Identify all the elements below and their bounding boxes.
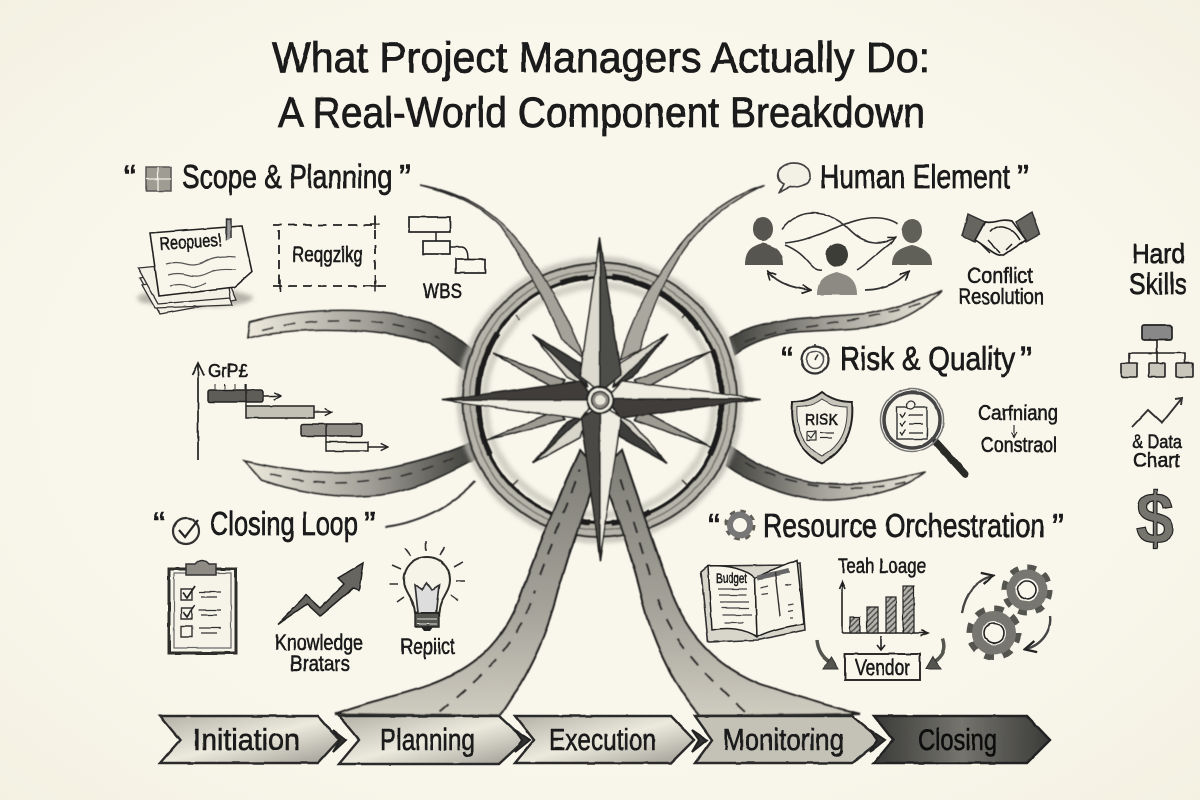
icon: handshake xyxy=(962,212,1040,255)
people network xyxy=(745,213,932,295)
road: lower right xyxy=(726,447,925,500)
icon: dollar sign: $ xyxy=(1136,479,1174,559)
person middle xyxy=(817,243,857,295)
road: lower left xyxy=(245,442,474,496)
chevron: execution xyxy=(515,716,707,763)
connection arrows xyxy=(782,213,895,243)
compass star xyxy=(442,238,760,560)
heading: hard skills: Skills xyxy=(1129,268,1187,301)
compass ring xyxy=(460,260,740,540)
title: A Real-World Component Breakdown xyxy=(278,89,925,137)
panel: hard skills xyxy=(1121,238,1193,559)
icon: rising arrow xyxy=(275,563,363,676)
heading: closing loop: “ xyxy=(153,504,165,545)
heading: risk and quality: Risk & Quality xyxy=(840,340,1015,377)
label: replicate: Repiict xyxy=(400,634,455,659)
chevron: monitoring: Monitoring xyxy=(723,722,844,757)
thin curve to closing loop xyxy=(385,481,475,527)
heading: human element: ” xyxy=(1017,157,1029,198)
chevron: planning xyxy=(339,716,530,764)
heading: closing loop: ” xyxy=(364,504,376,545)
icon: org chart xyxy=(1121,325,1193,377)
dashed scope box xyxy=(273,215,386,292)
chevron: initiation xyxy=(160,716,346,763)
icon: line chart xyxy=(1132,398,1182,427)
label: data chart xyxy=(1132,432,1182,472)
panel: human element xyxy=(745,157,1044,309)
heading: resource orchestration xyxy=(708,506,1064,547)
heading: human element xyxy=(778,157,1029,198)
east point xyxy=(606,381,760,418)
icon: rising arrow: Bratars xyxy=(290,651,350,676)
heading: risk and quality: “ xyxy=(781,339,793,380)
heading: hard skills: Hard xyxy=(1132,238,1185,269)
heading: scope and planning: “ xyxy=(124,157,136,198)
heading: closing loop: Closing Loop xyxy=(210,505,358,542)
heading: scope and planning: ” xyxy=(399,157,411,198)
chevron: planning: Planning xyxy=(380,722,475,757)
heading: risk and quality: ” xyxy=(1020,339,1032,380)
label: conflict resolution: Conflict xyxy=(967,263,1033,288)
heading: scope and planning: Scope & Planning xyxy=(182,158,392,195)
vendor box with arrows: Vendor xyxy=(855,655,910,680)
panel: scope and planning xyxy=(124,157,485,460)
heading: resource orchestration: Resource Orchestration xyxy=(763,507,1045,544)
label: control loop: Carfniang xyxy=(978,402,1058,425)
road: upper right xyxy=(730,290,942,354)
icon: magnifier checklist xyxy=(880,388,965,474)
icon: risk shield xyxy=(792,392,852,463)
icon: budget book: Budget xyxy=(716,570,747,586)
chevron: execution: Execution xyxy=(549,722,656,757)
heading: hard skills xyxy=(1129,238,1187,301)
gantt chart: GrP£ xyxy=(208,361,248,381)
panel: resource orchestration xyxy=(701,506,1064,680)
chevron: initiation: Initiation xyxy=(193,722,300,757)
road: lower right big xyxy=(602,450,860,716)
chevron: closing: Closing xyxy=(918,722,997,757)
process chevrons xyxy=(160,716,1050,764)
central compass with roads xyxy=(245,185,942,716)
chevron: closing xyxy=(874,716,1050,763)
icon: rising arrow: Knowledge xyxy=(275,630,363,655)
icon: gears xyxy=(962,568,1050,657)
panel: risk and quality xyxy=(781,339,1058,474)
heading: risk and quality xyxy=(781,339,1032,380)
dashed scope box: Reqgzlkg xyxy=(292,242,363,267)
WBS tree xyxy=(409,217,485,303)
chevron: monitoring xyxy=(695,716,885,763)
label: control loop xyxy=(978,402,1058,457)
label: conflict resolution: Resolution xyxy=(958,284,1044,309)
dark ring arcs xyxy=(478,277,722,523)
icon: risk shield: RISK xyxy=(805,412,838,429)
WBS tree: WBS xyxy=(423,280,462,303)
road: thin upper left xyxy=(420,185,584,358)
heading: closing loop xyxy=(153,504,376,545)
label: control loop: Constraol xyxy=(981,434,1057,457)
road: lower left big xyxy=(335,450,598,716)
title xyxy=(272,34,930,137)
north point xyxy=(580,238,621,392)
tertiary points xyxy=(487,352,710,447)
gantt chart xyxy=(192,361,387,460)
diagonal points xyxy=(533,335,667,463)
icon: request notes xyxy=(137,219,253,314)
icon: request notes: Reopues! xyxy=(159,230,222,254)
heading: human element: Human Element xyxy=(820,158,1010,195)
compass hub xyxy=(587,387,613,413)
panel: closing loop xyxy=(153,504,465,676)
person right xyxy=(892,219,932,265)
heading: scope and planning xyxy=(124,157,411,198)
west point xyxy=(442,381,594,419)
heading: resource orchestration: “ xyxy=(708,506,720,547)
heading: resource orchestration: ” xyxy=(1052,506,1064,547)
person left xyxy=(745,217,783,265)
vendor box with arrows xyxy=(817,636,944,680)
label: data chart: Chart xyxy=(1133,450,1180,472)
road: thin upper right xyxy=(620,185,765,360)
south point xyxy=(581,404,621,560)
label: data chart: & Data xyxy=(1132,432,1182,453)
road: upper left xyxy=(248,310,472,370)
label: conflict resolution xyxy=(958,263,1044,309)
icon: light bulb xyxy=(389,541,465,631)
icon: budget book xyxy=(701,560,805,642)
title: What Project Managers Actually Do: xyxy=(272,34,930,82)
bar chart xyxy=(838,555,928,636)
bar chart: Teah Loage xyxy=(838,555,926,578)
icon: clipboard xyxy=(169,560,236,653)
